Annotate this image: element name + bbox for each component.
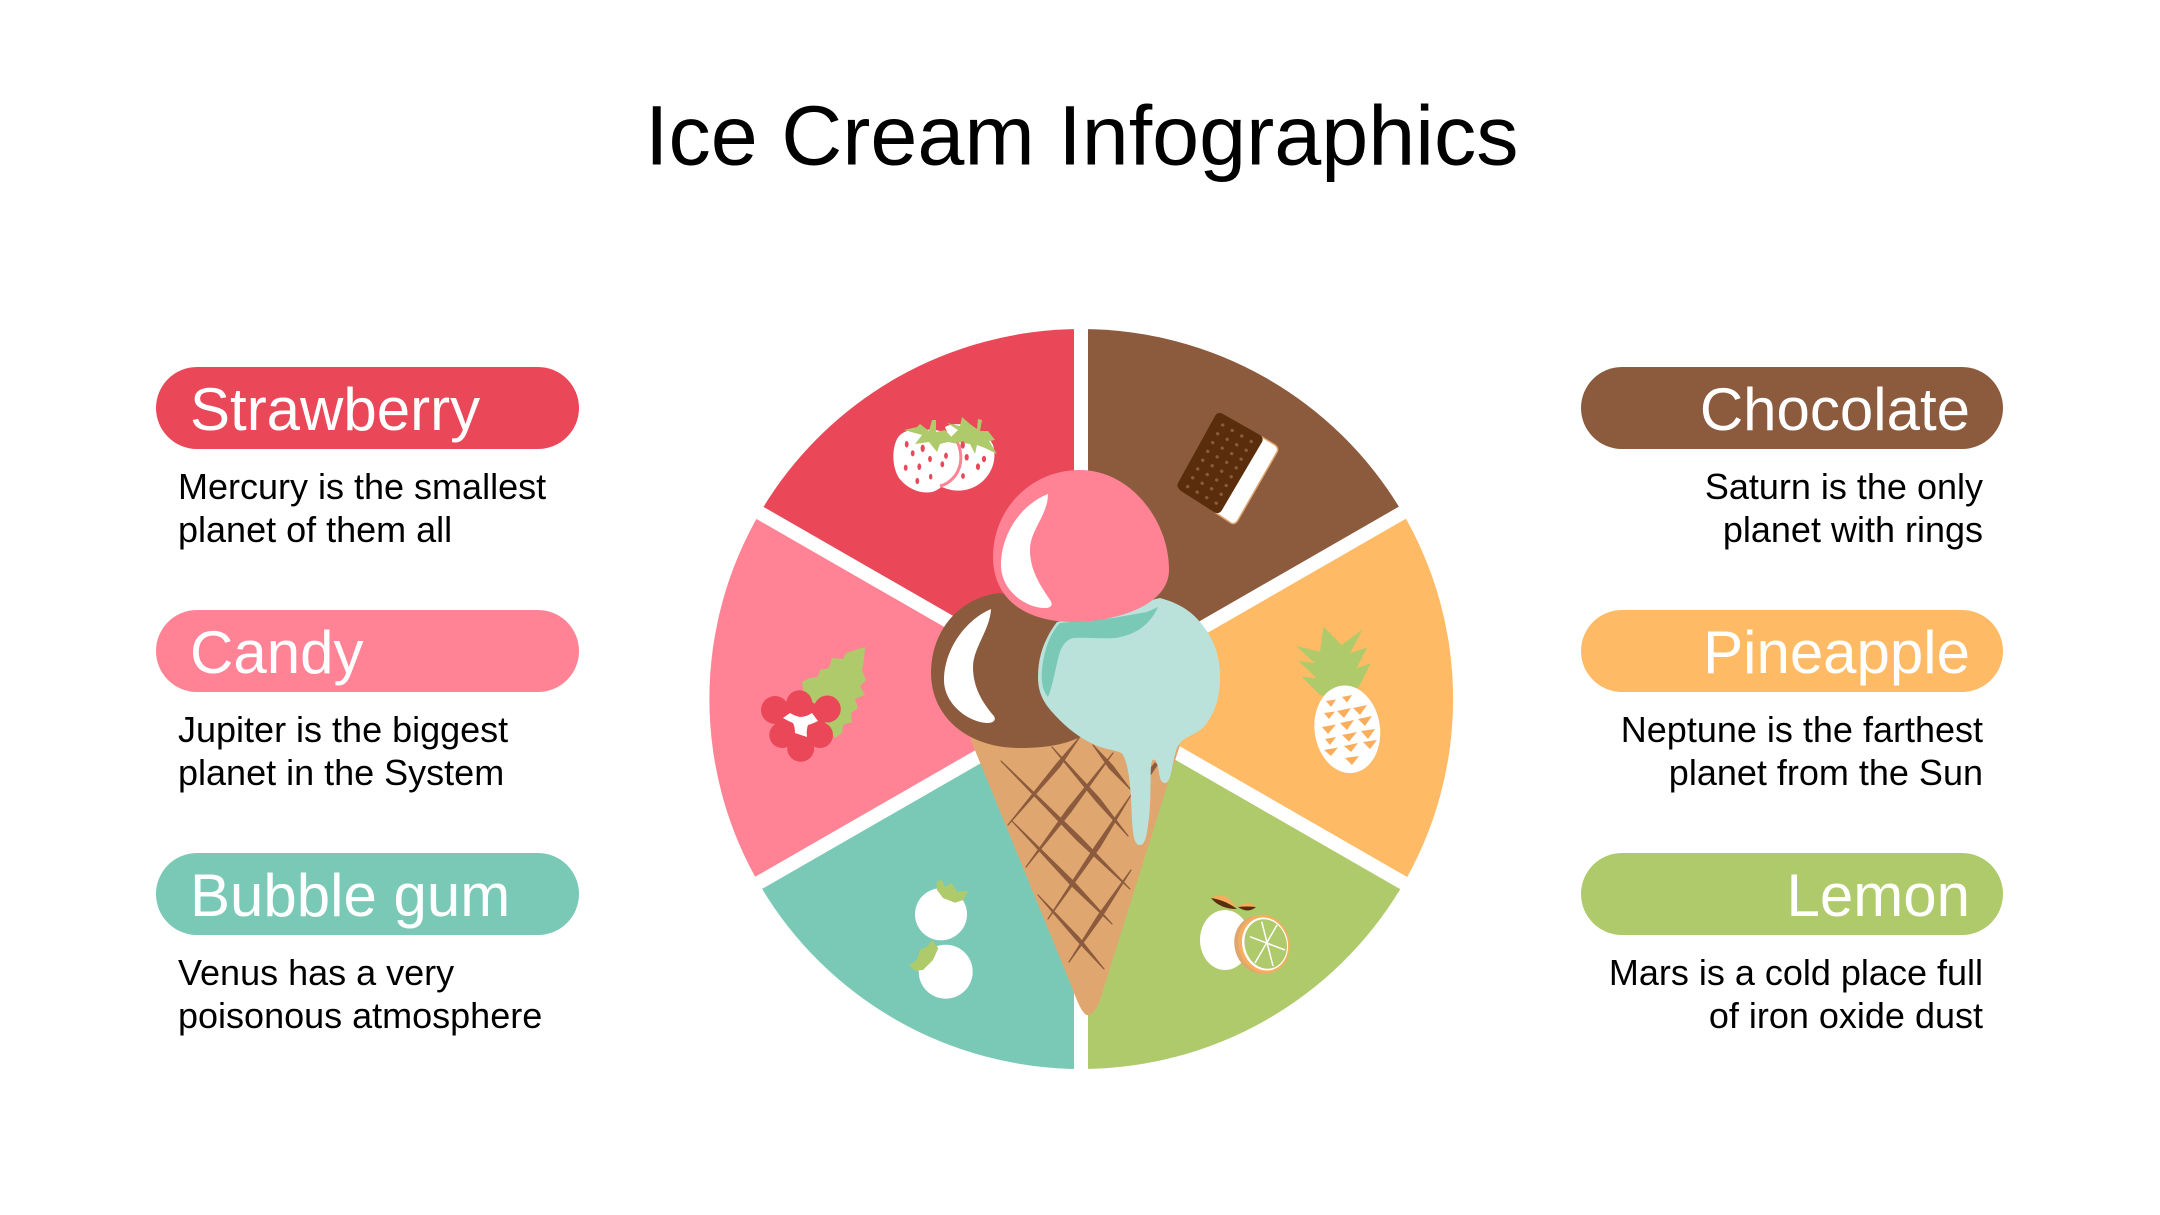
icon: blueberries [909,880,973,999]
panel: pineapple label [1581,610,2003,793]
icon: lemon [1200,895,1296,979]
lemon pill [1581,853,2003,935]
bubble gum description: Venus has a very [178,952,454,993]
candy pill: Candy [190,619,363,686]
lemon pill: Lemon [1787,862,1970,929]
title: Ice Cream Infographics [645,88,1519,182]
mint shadow [1042,607,1158,697]
lemon description [1609,952,1983,1036]
strawberry pill [156,367,579,449]
pineapple pill: Pineapple [1703,619,1970,686]
panel: strawberry label [156,367,579,550]
sector: pineapple [1081,511,1453,887]
sector: chocolate [1081,329,1402,698]
strawberry description [178,466,546,550]
panel: lemon label [1581,853,2003,1036]
icon: strawberries [893,417,997,492]
strawberry description: Mercury is the smallest [178,466,546,507]
pineapple pill [1581,610,2003,692]
sector: candy [709,511,1081,887]
sector: strawberry [761,329,1081,698]
candy description: planet in the System [178,752,504,793]
icon: ice cream sandwich [1177,413,1278,524]
sector: lemon [1081,698,1402,1069]
chocolate highlight [944,609,995,723]
ice cream cone [931,470,1220,1015]
chocolate scoop [931,593,1100,748]
bubble gum pill [156,853,579,935]
icon: raspberry [761,647,866,762]
candy description: Jupiter is the biggest [178,709,508,750]
pineapple description: planet from the Sun [1669,752,1983,793]
candy highlight [1001,494,1052,608]
chocolate description [1705,466,1983,550]
bubble gum description: poisonous atmosphere [178,995,542,1036]
panel: chocolate label [1581,367,2003,550]
chocolate description: planet with rings [1723,509,1983,550]
candy pill [156,610,579,692]
sector: bubble gum [761,698,1081,1069]
pineapple description: Neptune is the farthest [1621,709,1983,750]
candy scoop [993,470,1169,622]
waffle pattern [1001,738,1157,969]
lemon description: Mars is a cold place full [1609,952,1983,993]
strawberry description: planet of them all [178,509,452,550]
strawberry pill: Strawberry [190,376,480,443]
bubble gum pill: Bubble gum [190,862,510,929]
chocolate description: Saturn is the only [1705,466,1983,507]
cone body [970,730,1180,1015]
chocolate pill [1581,367,2003,449]
panel: bubble gum label [156,853,579,1036]
icon: pineapple [1296,627,1386,777]
mint scoop [1038,598,1220,845]
chocolate pill: Chocolate [1700,376,1970,443]
lemon description: of iron oxide dust [1709,995,1983,1036]
bubble gum description [178,952,542,1036]
panel: candy label [156,610,579,793]
pineapple description [1621,709,1983,793]
candy description [178,709,508,793]
pie wheel [709,315,1453,1083]
